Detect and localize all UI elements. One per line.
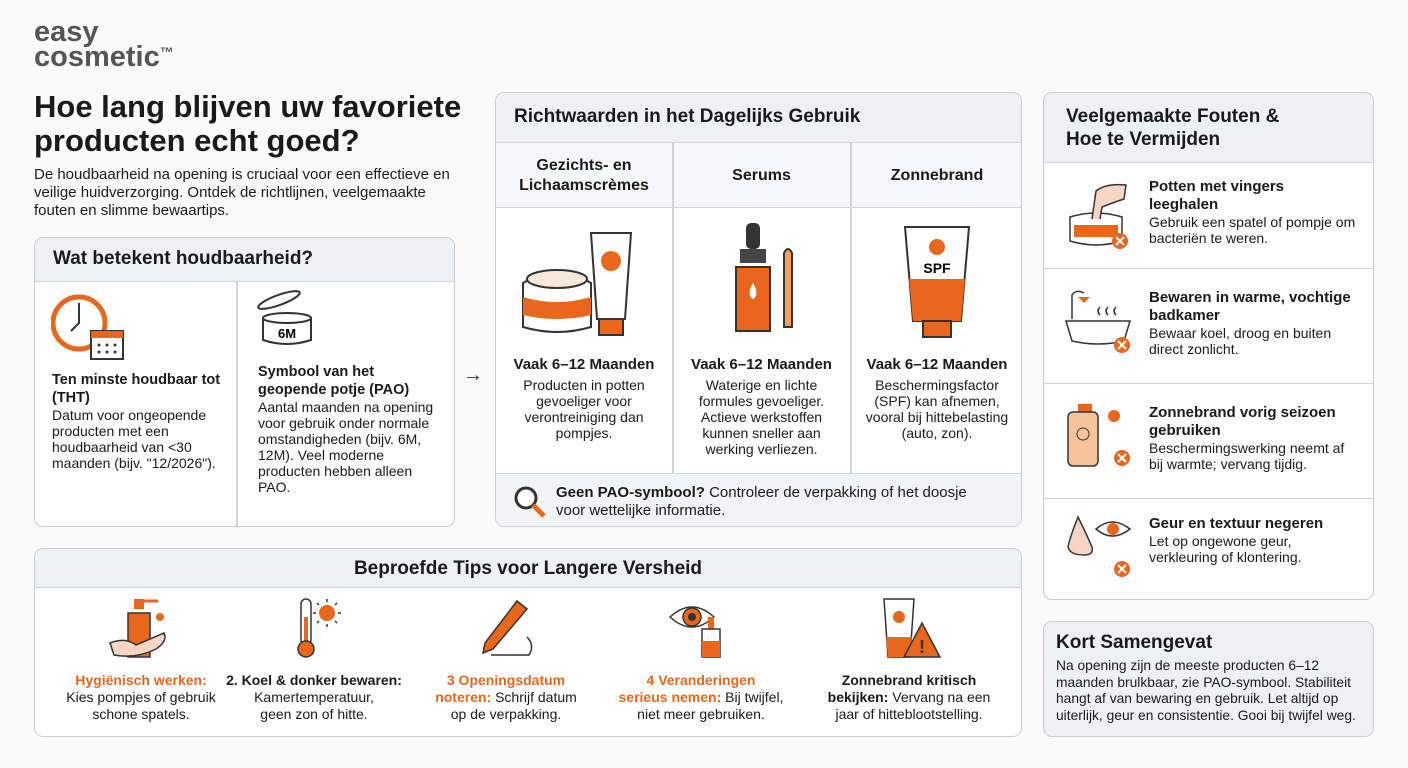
column: serums: Serums — [732, 166, 791, 184]
icon: serum dropper — [735, 223, 793, 332]
heading — [35, 238, 454, 282]
tip 4: niet meer gebruiken. — [637, 706, 765, 722]
tip 5 — [828, 598, 990, 722]
title: Hoe lang blijven uw favoriete producten echt goed? — [34, 89, 461, 158]
mistake 2: Bewaar koel, droog en buiten direct zonlicht. — [1149, 325, 1331, 357]
panel: wat betekent houdbaarheid — [34, 237, 455, 527]
icon: PAO jar: 6M — [278, 326, 296, 341]
icon: cream jar and tube — [522, 232, 632, 336]
mistake 2: Bewaren in warme, vochtige badkamer — [1149, 289, 1351, 324]
column: cremes: Producten in potten gevoeliger voor verontreiniging dan pompjes. — [523, 377, 645, 441]
tip 2: 2. Koel & donker bewaren: — [226, 672, 402, 688]
column: serums: Vaak 6–12 Maanden — [691, 356, 832, 373]
mistake 1: Gebruik een spatel of pompje om bacteriën te weren. — [1149, 214, 1355, 246]
column: zonnebrand — [866, 166, 1008, 441]
column: zonnebrand: Vaak 6–12 Maanden — [867, 356, 1007, 373]
tip 5: ! — [919, 637, 925, 657]
tip 2: geen zon of hitte. — [260, 706, 368, 722]
heading: Beproefde Tips voor Langere Versheid — [354, 558, 702, 579]
text: PAO: Symbool van het geopende potje (PAO) — [258, 364, 409, 398]
column: zonnebrand: Beschermingsfactor (SPF) kan afnemen, vooral bij hittebelasting (auto, zon). — [866, 377, 1008, 441]
heading: Richtwaarden in het Dagelijks Gebruik — [514, 106, 860, 127]
text: THT: Ten minste houdbaar tot (THT) — [52, 372, 220, 406]
mistake 1 — [1044, 163, 1375, 269]
mistake 1: Potten met vingers leeghalen — [1149, 178, 1284, 213]
mistake 3: Beschermingswerking neemt af bij warmte; vervang tijdig. — [1149, 440, 1344, 472]
icon: SPF tube — [904, 226, 970, 338]
tip 2 — [226, 598, 402, 722]
tip 4 — [619, 606, 783, 722]
column: serums — [691, 166, 832, 457]
text: THT — [52, 372, 220, 471]
column: cremes — [514, 156, 654, 441]
tip 1: Kies pompjes of gebruik schone spatels. — [66, 689, 216, 722]
mistake 3: Zonnebrand vorig seizoen gebruiken — [1149, 404, 1336, 439]
icon: SPF tube: SPF — [923, 260, 951, 276]
intro text: De houdbaarheid na opening is cruciaal voor een effectieve en veilige huidverzorging. Ontdek de richtlijnen, veelgemaakte fouten en slimme bewaartips. — [34, 166, 450, 219]
mistake 4: Let op ongewone geur, verkleuring of klontering. — [1149, 533, 1302, 565]
logo: cosmetic™ — [34, 41, 174, 73]
heading: Veelgemaakte Fouten & — [1066, 106, 1279, 127]
column: cremes: Lichaamscrèmes — [519, 176, 649, 194]
column: zonnebrand: Zonnebrand — [891, 166, 983, 184]
tip 1 — [66, 599, 216, 722]
arrow: → — [463, 364, 483, 386]
panel: tips — [34, 548, 1022, 737]
mistake 3 — [1044, 384, 1375, 499]
column: cremes: Gezichts- en — [536, 156, 632, 174]
text: PAO: Aantal maanden na opening voor gebruik onder normale omstandigheden (bijv. 6M, 12M). Veel moderne producten hebben alleen PAO. — [258, 399, 433, 495]
tip 4: 4 Veranderingen — [647, 672, 755, 688]
heading — [1044, 93, 1373, 163]
mistake 2 — [1044, 269, 1375, 384]
heading: Kort Samengevat — [1056, 632, 1212, 653]
tip 2: Kamertemperatuur, — [254, 689, 374, 705]
heading: Hoe te Vermijden — [1066, 129, 1220, 150]
logo — [34, 16, 174, 73]
mistake 4 — [1067, 515, 1323, 577]
text: THT: Datum voor ongeopende producten met een houdbaarheid van <30 maanden (bijv. "12/2026"). — [52, 407, 216, 471]
callout: geen PAO: Geen PAO-symbool? Controleer de verpakking of het doosje voor wettelijke informatie. — [556, 484, 967, 519]
mistake 4: Geur en textuur negeren — [1149, 515, 1323, 532]
logo: easy — [34, 16, 99, 48]
tip 3 — [435, 600, 577, 722]
panel: kort samengevat — [1043, 621, 1374, 737]
column: cremes: Vaak 6–12 Maanden — [514, 356, 654, 373]
panel: fouten — [1043, 92, 1374, 600]
icon: clock calendar — [51, 294, 124, 360]
heading — [35, 549, 1021, 588]
panel: richtwaarden — [495, 92, 1022, 527]
summary text: Na opening zijn de meeste producten 6–12 maanden brulkbaar, zie PAO-symbool. Stabiliteit hangt af van bewaring en gebruik. Let altijd op uiterlijk, geur en consistentie. Gooi bij twijfel weg. — [1056, 658, 1356, 722]
tip 3: 3 Openingsdatum noteren: Schrijf datum op de verpakking. — [435, 672, 577, 722]
column: serums: Waterige en lichte formules gevoeliger. Actieve werkstoffen kunnen sneller aan werking verliezen. — [699, 377, 824, 457]
tip 4: serieus nemen: Bij twijfel, — [619, 689, 783, 705]
heading — [496, 93, 1021, 143]
callout: geen PAO — [496, 473, 1023, 528]
heading: Wat betekent houdbaarheid? — [53, 248, 313, 269]
tip 5: Zonnebrand kritisch bekijken: Vervang na een jaar of hitteblootstelling. — [828, 672, 990, 722]
icon: PAO jar — [257, 290, 312, 345]
icon: magnifier — [514, 486, 546, 518]
tip 1: Hygiënisch werken: — [75, 672, 207, 688]
